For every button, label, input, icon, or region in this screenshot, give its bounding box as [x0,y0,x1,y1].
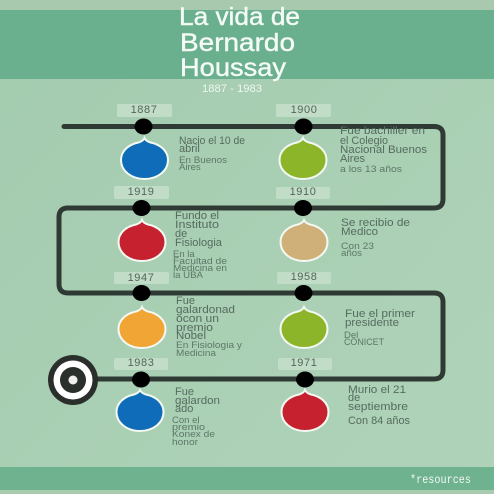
event 1947 [114,272,242,359]
event 1947: En Fisiologia y [176,340,242,351]
resources note: *resources [410,473,471,487]
event 1947: Nobel [176,330,206,342]
event 1983: Con el [172,415,199,426]
event 1958: Del [344,330,358,341]
event 1947: Medicina [176,348,217,359]
event 1910: años [341,248,362,259]
footer band [0,467,494,490]
title: La vida de [179,3,300,31]
timeline path [59,126,443,379]
event 1947: galardonad [176,304,235,316]
event 1958: presidente [345,317,399,329]
event 1887: Aires [179,162,201,173]
event 1971: Murio el 21 [348,384,406,396]
event 1887: 1887 [131,104,157,116]
bottom strip [0,490,494,494]
event 1900: 1900 [291,104,317,116]
event 1983: Konex de [172,429,215,440]
event 1919: Facultad de [173,256,227,267]
top strip [0,0,494,10]
event 1958: CONICET [344,337,384,348]
event 1971: septiembre [348,401,408,413]
title: Houssay [180,54,287,82]
target end marker [48,355,98,405]
event 1958: Fue el primer [345,308,415,320]
title [179,3,300,82]
event 1900: Fue bachiller en [340,125,425,137]
event 1947: 1947 [128,272,154,284]
event 1900: Nacional Buenos [340,144,428,156]
event 1971: de [348,392,360,404]
event 1887: abril [179,143,200,155]
event 1983 [114,357,220,448]
event 1971: 1971 [291,357,317,369]
event 1947: Fue [176,295,195,307]
event 1900: a los 13 años [340,164,402,175]
event 1919: de [175,228,187,240]
event 1983: ado [175,403,193,415]
event 1910: 1910 [290,186,316,198]
title: Bernardo [180,29,295,57]
event 1919: Fisiologia [175,237,223,249]
event 1919: En la [173,249,195,260]
event 1971: Con 84 años [348,415,410,427]
event 1919 [114,186,227,281]
event 1900: Aires [340,153,366,165]
event 1983: honor [172,437,198,448]
event 1958: 1958 [291,271,317,283]
event 1900: el Colegio [340,135,388,147]
event 1887: En Buenos [179,155,227,166]
event 1971 [278,357,410,431]
event 1983: premio [172,422,205,433]
event 1887 [117,104,245,179]
dates subtitle: 1887 - 1983 [202,83,262,95]
event 1919: 1919 [128,186,154,198]
event 1900 [276,104,428,179]
header banner [0,10,494,79]
event 1910: Se recibio de [341,217,410,229]
event 1983: Fue [175,386,194,398]
event 1910 [276,186,410,261]
event 1947: ocon un [176,313,219,325]
event 1919: la UBA [173,270,204,281]
event 1919: Medicina en [173,263,227,274]
event 1983: 1983 [128,357,154,369]
event 1983: galardon [175,395,220,407]
event 1919: Fundo el [175,210,219,222]
event 1910: Con 23 [341,241,374,252]
event 1947: premio [176,322,213,334]
event 1887: Nacio el 10 de [179,135,245,147]
event 1910: Medico [341,226,378,238]
event 1919: Instituto [175,219,219,231]
event 1958 [277,271,415,348]
